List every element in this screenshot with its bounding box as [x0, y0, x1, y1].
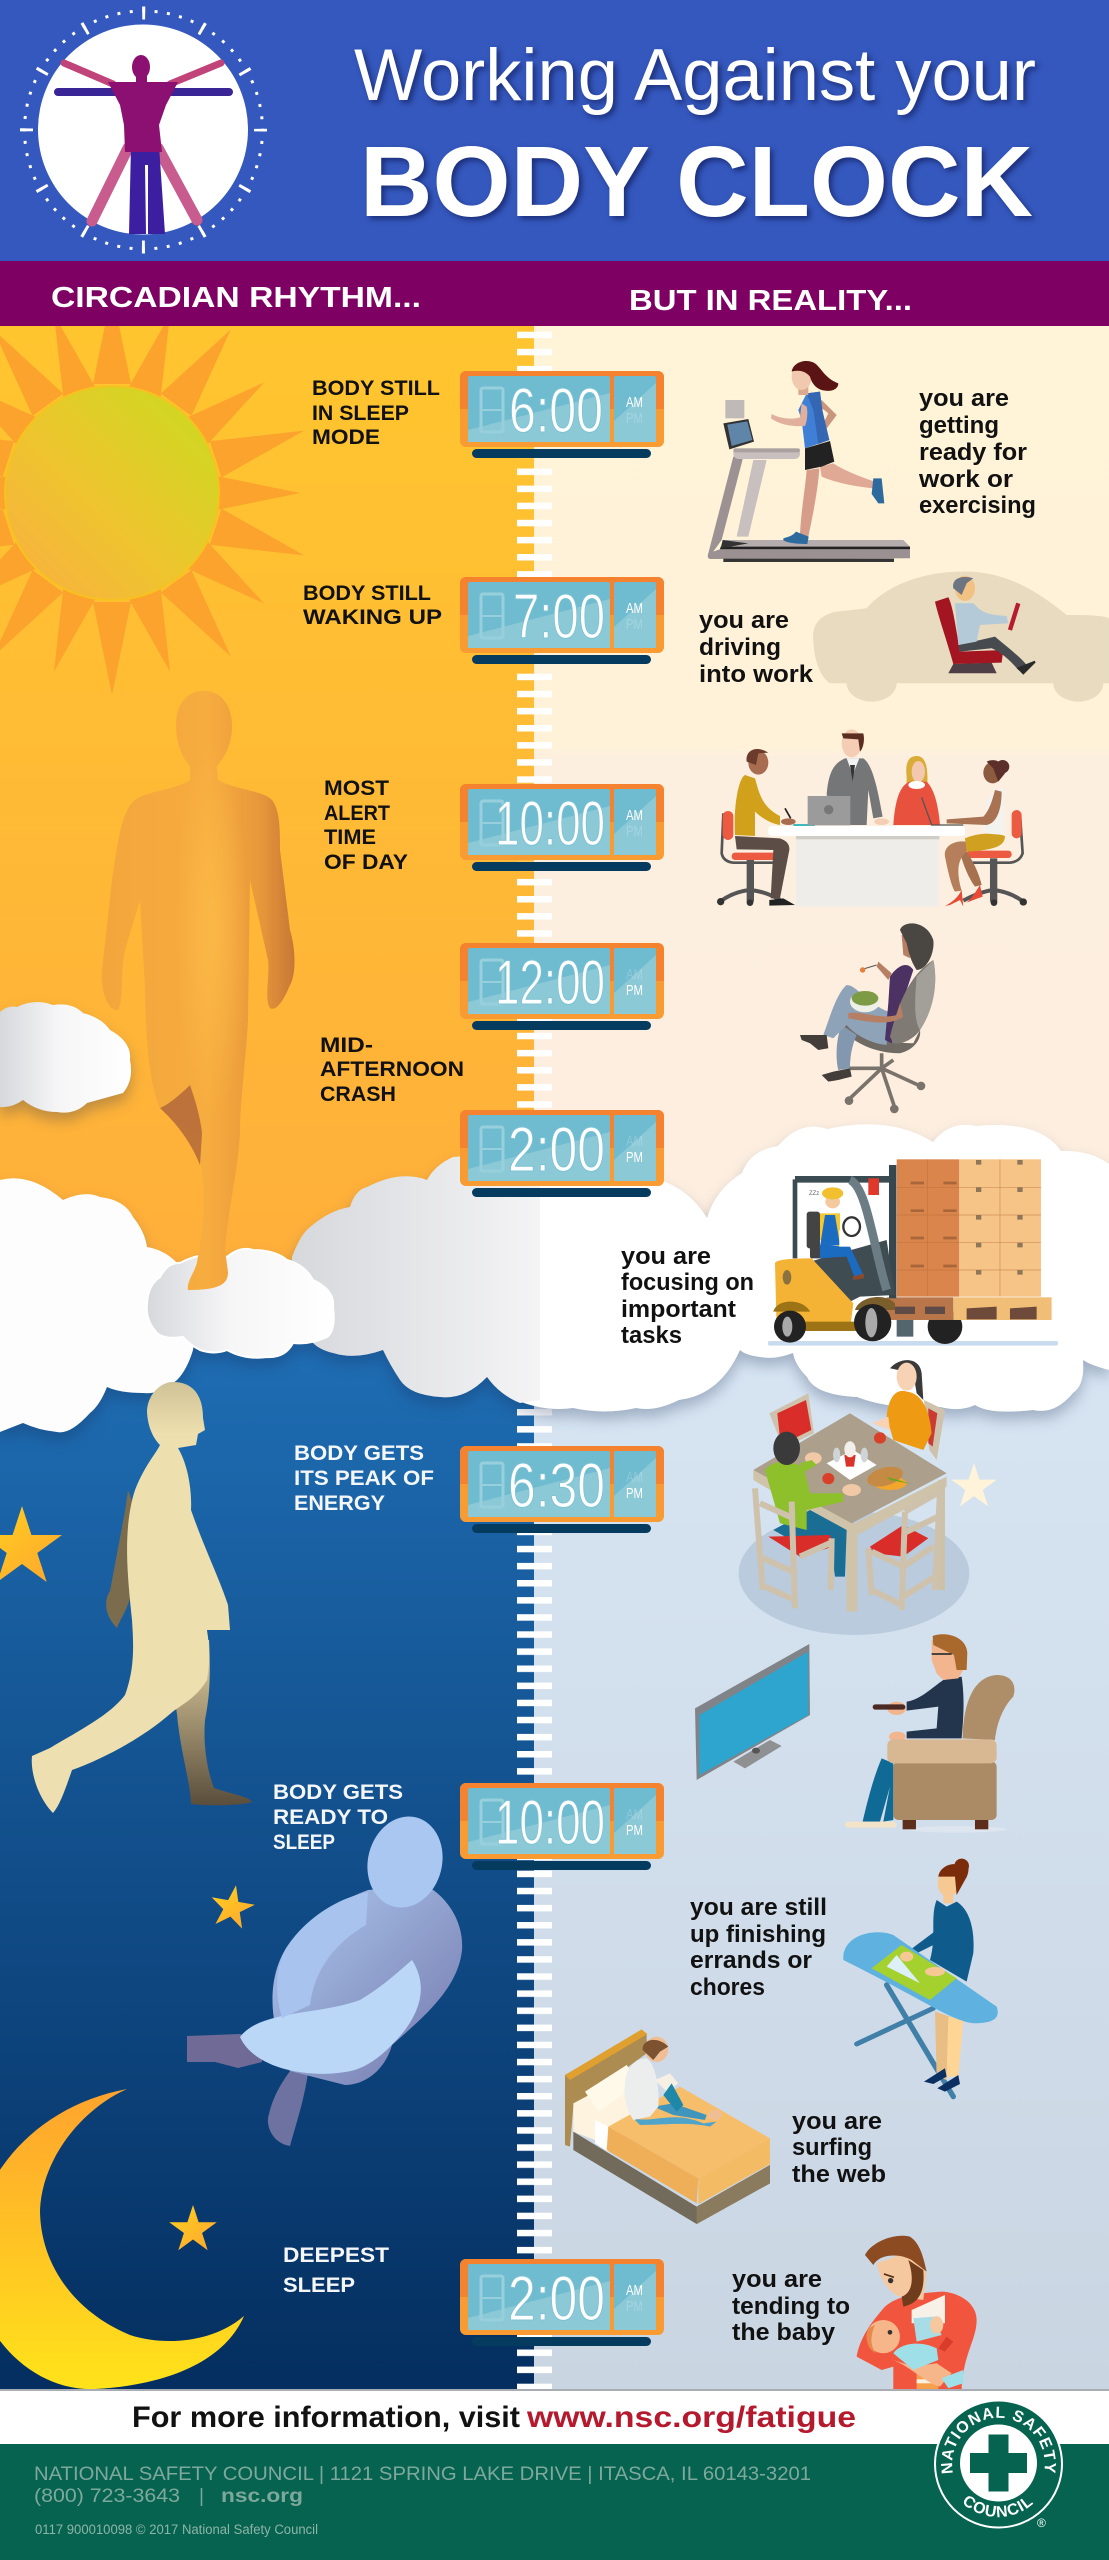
illustration: man watching tv: [695, 1634, 1014, 1833]
label: body still in sleep mode: BODY STILL: [312, 377, 440, 400]
text: driving into work: [699, 607, 814, 688]
text: focusing on important tasks: focusing on: [621, 1269, 754, 1296]
text: errands or chores: [690, 1894, 827, 2001]
text: getting ready for work: exercising: [919, 492, 1036, 519]
label: body still waking up: [303, 582, 442, 629]
timeline ticks: [517, 326, 552, 2390]
clock: 12:00 PM: PM: [626, 982, 643, 999]
label: body gets ready to sleep: READY TO: [273, 1806, 388, 1829]
illustration: woman ironing: [843, 1859, 998, 2097]
clock: 2:00 AM: AM: [626, 2282, 643, 2299]
text: driving into work: into work: [699, 661, 814, 688]
clock: 10:00 AM: [460, 784, 664, 871]
woman in orange: [872, 1360, 932, 1450]
text: getting ready for work: getting: [919, 412, 999, 439]
text: getting ready for work: work or: [918, 466, 1013, 493]
text: focusing on important tasks: tasks: [621, 1322, 682, 1349]
label: body still waking up: BODY STILL: [303, 582, 431, 605]
cloud: left white: [0, 1178, 200, 1432]
clock: 6:30 PM: AM: [626, 1469, 643, 1486]
label: deepest sleep: [283, 2244, 389, 2297]
clock: 6:30 PM: PM: [626, 1485, 643, 1502]
clock: 10:00 PM: PM: [626, 1822, 643, 1839]
clock: 2:00 PM: 2:00: [508, 1115, 605, 1185]
text: focusing on important tasks: you are: [621, 1243, 711, 1270]
label: body gets its peak of energy: BODY GETS: [294, 1442, 424, 1465]
text: tending to the baby: you are: [732, 2266, 822, 2293]
clock: 6:00 AM: AM: [626, 394, 643, 411]
text: errands or chores: up finishing: [690, 1921, 826, 1948]
icon: sun: [0, 291, 310, 695]
label: body gets its peak of energy: ITS PEAK OF: [294, 1467, 434, 1490]
text: errands or chores: you are still: [690, 1894, 827, 1921]
clock: 2:00 AM: [460, 2259, 664, 2346]
icon: moon star: [169, 2205, 217, 2250]
text: tending to the baby: the baby: [732, 2319, 836, 2346]
icon: crescent moon: [0, 2089, 244, 2389]
label: mid-afternoon crash: AFTERNOON: [320, 1058, 464, 1081]
clock: 2:00 AM: PM: [626, 2298, 643, 2315]
man in green: [765, 1432, 861, 1577]
logo: body in clock: [24, 11, 262, 249]
footer: green contact band: NATIONAL SAFETY COUNCIL | 1121 SPRING LAKE DRIVE | ITASCA, IL 60143-3201: [34, 2464, 811, 2485]
cloud: right white: [500, 1124, 1109, 1412]
title: [354, 35, 1036, 238]
clock: 2:00 AM: 2:00: [508, 2264, 605, 2334]
logo: national safety council: NATIONAL SAFETY: [941, 2406, 1056, 2474]
text: focusing on important tasks: important: [621, 1296, 736, 1323]
text: getting ready for work: you are: [919, 385, 1009, 412]
text: getting ready for work: [918, 385, 1036, 519]
clock: 12:00 PM: AM: [626, 966, 643, 983]
illustration: forklift with boxes: ZZz: [809, 1191, 819, 1197]
label: most alert time of day: MOST: [324, 777, 389, 800]
label: mid-afternoon crash: [320, 1034, 464, 1106]
footer: information band: For more information, visit: [132, 2401, 520, 2434]
label: body gets ready to sleep: BODY GETS: [273, 1781, 403, 1804]
illustration: office meeting: [717, 729, 1027, 907]
text: errands or chores: errands or: [690, 1947, 812, 1974]
clock: 10:00 PM: [460, 1783, 664, 1870]
footer: information band: www.nsc.org/fatigue: [526, 2401, 856, 2434]
label: most alert time of day: OF DAY: [324, 851, 408, 874]
clock: 12:00 PM: 12:00: [495, 948, 605, 1018]
footer: green contact band: nsc.org: [221, 2486, 303, 2507]
clock: 10:00 PM: 10:00: [495, 1788, 605, 1858]
text: surfing the web: you are: [792, 2108, 882, 2135]
text: surfing the web: surfing: [792, 2134, 872, 2161]
figure: orange standing body: [102, 691, 295, 1290]
text: getting ready for work: ready for: [919, 439, 1027, 466]
clock: 7:00 AM: PM: [626, 616, 643, 633]
illustration: woman eating in chair: [800, 923, 935, 1113]
icon: cream star: [951, 1463, 997, 1506]
text: focusing on important tasks: [621, 1243, 754, 1349]
logo: national safety council: ®: [1037, 2516, 1046, 2530]
front chairs: [755, 1488, 940, 1610]
label: most alert time of day: ALERT: [324, 802, 390, 825]
blonde woman: [893, 756, 940, 825]
illustration: woman on treadmill: [708, 361, 910, 562]
clock: 7:00 AM: AM: [626, 600, 643, 617]
label: body still in sleep mode: [312, 377, 440, 449]
icon: large star: [0, 1506, 62, 1582]
figure: blue curled body: [187, 1808, 462, 2146]
cloud: center gray: [292, 1150, 540, 1403]
clock: 6:00 AM: PM: [626, 410, 643, 427]
text: surfing the web: the web: [792, 2161, 886, 2188]
clock: 10:00 AM: 10:00: [495, 789, 605, 859]
column heading bar: BUT IN REALITY...: [629, 285, 912, 317]
logo: national safety council: [934, 2402, 1063, 2530]
text: tending to the baby: tending to: [732, 2293, 850, 2320]
text: surfing the web: [792, 2108, 886, 2188]
illustration: father feeding baby: [857, 2236, 977, 2390]
label: body still in sleep mode: MODE: [312, 426, 380, 449]
title: BODY CLOCK: [360, 126, 1033, 238]
clock: 6:30 PM: [460, 1446, 664, 1533]
clouds: day to night divider: [0, 1002, 1109, 1432]
footer: green contact band: [0, 2444, 1109, 2560]
illustration: family at dining table: [739, 1360, 969, 1635]
cloud: under the foot: [147, 1249, 334, 1358]
clock: 2:00 PM: [460, 1110, 664, 1197]
label: most alert time of day: [324, 777, 408, 874]
clock: 10:00 AM: PM: [626, 823, 643, 840]
clock: 10:00 AM: AM: [626, 807, 643, 824]
food on table: [822, 1432, 912, 1490]
text: driving into work: you are: [699, 607, 789, 634]
label: body gets its peak of energy: [294, 1442, 434, 1515]
text: errands or chores: chores: [690, 1974, 765, 2001]
label: body gets ready to sleep: SLEEP: [273, 1831, 335, 1854]
clock: 12:00 PM: [460, 943, 664, 1030]
label: body still waking up: WAKING UP: [303, 606, 442, 629]
figure: cream walking body: [32, 1382, 252, 1813]
footer: green contact band: 0117 900010098 © 2017 National Safety Council: [35, 2522, 318, 2537]
footer: green contact band: (800) 723-3643: [34, 2486, 180, 2507]
column heading bar: CIRCADIAN RHYTHM...: [51, 282, 421, 314]
clock: 7:00 AM: 7:00: [513, 582, 605, 652]
illustration: forklift with boxes: [768, 1159, 1058, 1346]
clock: 10:00 PM: AM: [626, 1806, 643, 1823]
footer: green contact band: |: [199, 2486, 204, 2507]
label: deepest sleep: SLEEP: [283, 2274, 355, 2297]
icon: small star: [207, 1882, 258, 1930]
standing man: [827, 729, 889, 825]
label: body still in sleep mode: IN SLEEP: [312, 402, 409, 425]
label: mid-afternoon crash: MID-: [320, 1034, 373, 1057]
column heading bar: [0, 261, 1109, 326]
logo: national safety council: COUNCIL: [964, 2496, 1034, 2518]
label: mid-afternoon crash: CRASH: [320, 1083, 396, 1106]
illustration: man on bed with tablet: [565, 2029, 770, 2224]
footer: information band: [0, 2389, 1109, 2444]
text: driving into work: driving: [699, 634, 781, 661]
text: tending to the baby: [732, 2266, 850, 2346]
illustration: man driving car: [813, 572, 1109, 702]
label: body gets its peak of energy: ENERGY: [294, 1492, 385, 1515]
right woman: [945, 760, 1009, 907]
cloud: upper left: [0, 1002, 131, 1113]
title: Working Against your: [354, 35, 1036, 116]
clock: 6:00 AM: 6:00: [509, 376, 603, 446]
left chair: [717, 811, 780, 906]
label: deepest sleep: DEEPEST: [283, 2244, 389, 2267]
clock: 6:00 AM: [460, 371, 664, 458]
label: body gets ready to sleep: [273, 1781, 403, 1854]
label: most alert time of day: TIME: [324, 826, 376, 849]
clock: 7:00 AM: [460, 577, 664, 664]
right chair: [963, 810, 1027, 906]
clock: 2:00 PM: AM: [626, 1133, 643, 1150]
header band: [0, 0, 1109, 261]
clock: 2:00 PM: PM: [626, 1149, 643, 1166]
clock: 6:30 PM: 6:30: [508, 1451, 605, 1521]
